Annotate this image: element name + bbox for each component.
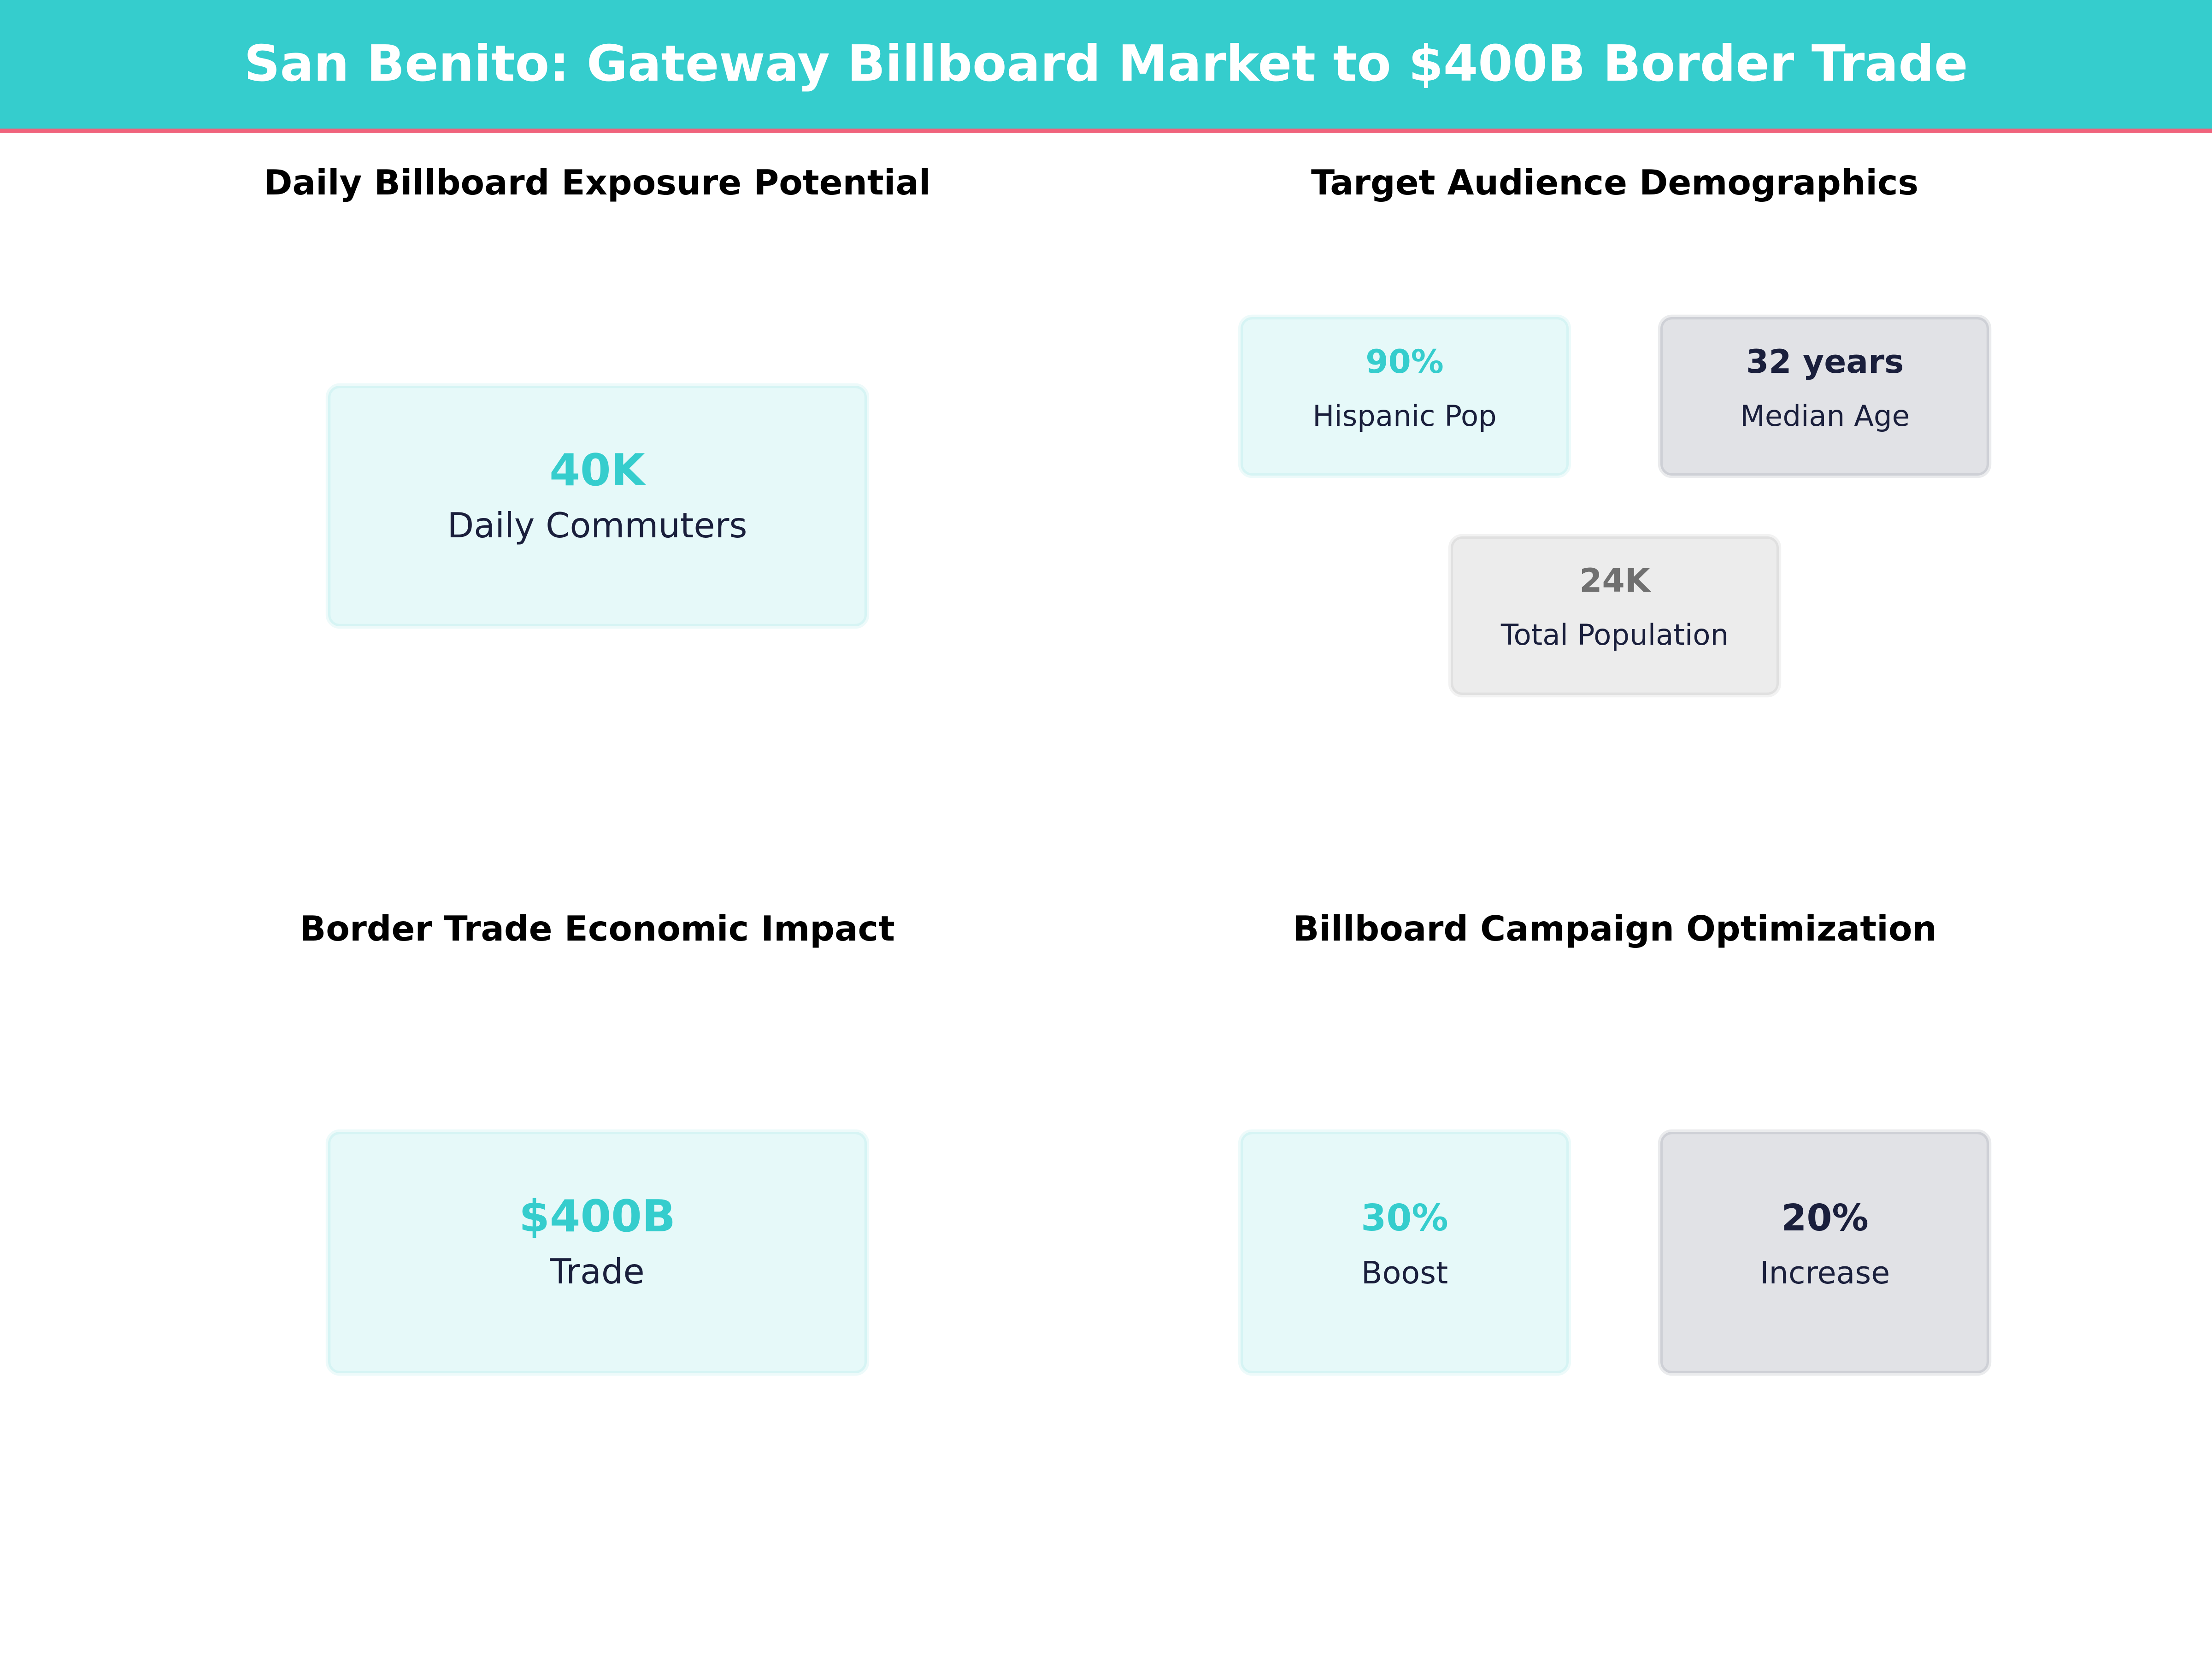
- heading: demographics: Target Audience Demographics: [1311, 162, 1918, 203]
- panel: campaign optimization: [1241, 908, 1989, 1373]
- card: trade: Trade: [549, 1251, 645, 1292]
- card: increase: [1660, 1132, 1989, 1373]
- card: median age: 32 years: [1746, 342, 1904, 381]
- header banner: [0, 0, 2212, 133]
- panel: daily billboard exposure: [264, 162, 931, 626]
- heading: exposure: Daily Billboard Exposure Potential: [264, 162, 931, 203]
- card: boost: 30%: [1361, 1197, 1448, 1239]
- card: trade: [328, 1132, 867, 1373]
- card: daily commuters: 40K: [549, 444, 647, 496]
- heading: trade impact: Border Trade Economic Impact: [300, 908, 895, 949]
- card: daily commuters: Daily Commuters: [447, 505, 747, 546]
- card: median age: [1660, 317, 1989, 476]
- card: daily commuters: [328, 386, 867, 626]
- card: boost: [1241, 1132, 1569, 1373]
- card: increase: 20%: [1781, 1197, 1869, 1239]
- card: total population: 24K: [1579, 561, 1652, 600]
- card: median age: Median Age: [1740, 399, 1910, 433]
- title: San Benito: Gateway Billboard Market to $400B Border Trade: [244, 34, 1968, 93]
- heading: optimization: Billboard Campaign Optimization: [1293, 908, 1937, 949]
- panel: border trade economic impact: [300, 908, 895, 1373]
- card: hispanic population: 90%: [1365, 342, 1444, 381]
- card: total population: Total Population: [1500, 618, 1729, 652]
- card: hispanic population: [1241, 317, 1569, 476]
- card: total population: [1451, 536, 1779, 695]
- card: increase: Increase: [1760, 1255, 1890, 1291]
- card: boost: Boost: [1361, 1255, 1448, 1291]
- card: hispanic population: Hispanic Pop: [1312, 399, 1497, 433]
- card: trade: $400B: [519, 1190, 676, 1242]
- panel: target audience demographics: [1241, 162, 1989, 695]
